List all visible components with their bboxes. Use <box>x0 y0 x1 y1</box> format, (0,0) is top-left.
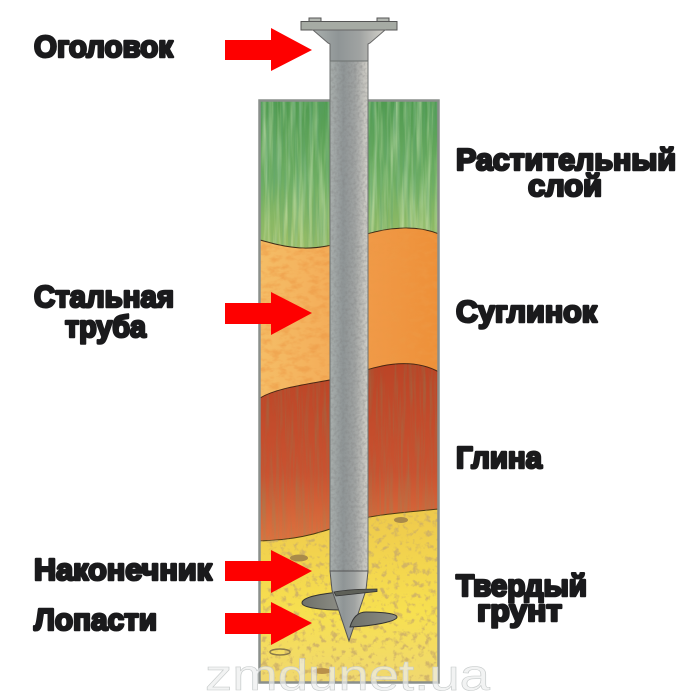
arrow: cap <box>225 28 312 71</box>
label: steel pipe <box>34 279 174 344</box>
arrow: blades <box>225 602 312 645</box>
label: clay: Глина <box>456 440 543 475</box>
frame <box>260 100 438 682</box>
flange tabs <box>309 18 389 22</box>
label: topsoil: слой <box>528 168 602 203</box>
layer: hard ground <box>260 509 439 682</box>
tip <box>330 571 368 641</box>
label: blades: Лопасти <box>34 602 157 637</box>
layer: topsoil <box>260 100 439 250</box>
arrow: tip <box>225 550 312 593</box>
layer: clay <box>260 360 439 546</box>
label: hard ground <box>456 568 587 628</box>
layer: loam <box>260 226 439 401</box>
steel pipe <box>301 18 397 641</box>
flange plate <box>301 22 397 30</box>
label: hard ground: грунт <box>477 593 562 628</box>
label: steel pipe: Стальная <box>34 279 174 314</box>
label: cap: Оголовок <box>34 29 173 64</box>
label: loam: Суглинок <box>456 294 597 329</box>
label: topsoil: Растительный <box>456 142 676 177</box>
label: tip: Наконечник <box>34 552 212 587</box>
soil column <box>260 100 439 682</box>
pipe body <box>330 61 368 571</box>
arrow: steel pipe <box>225 292 312 335</box>
label: hard ground: Твердый <box>456 568 587 603</box>
cone under flange <box>313 30 385 61</box>
helical blade front <box>334 589 397 627</box>
label: steel pipe: труба <box>65 309 147 344</box>
helical blades back <box>302 592 340 610</box>
label: topsoil <box>456 142 676 203</box>
